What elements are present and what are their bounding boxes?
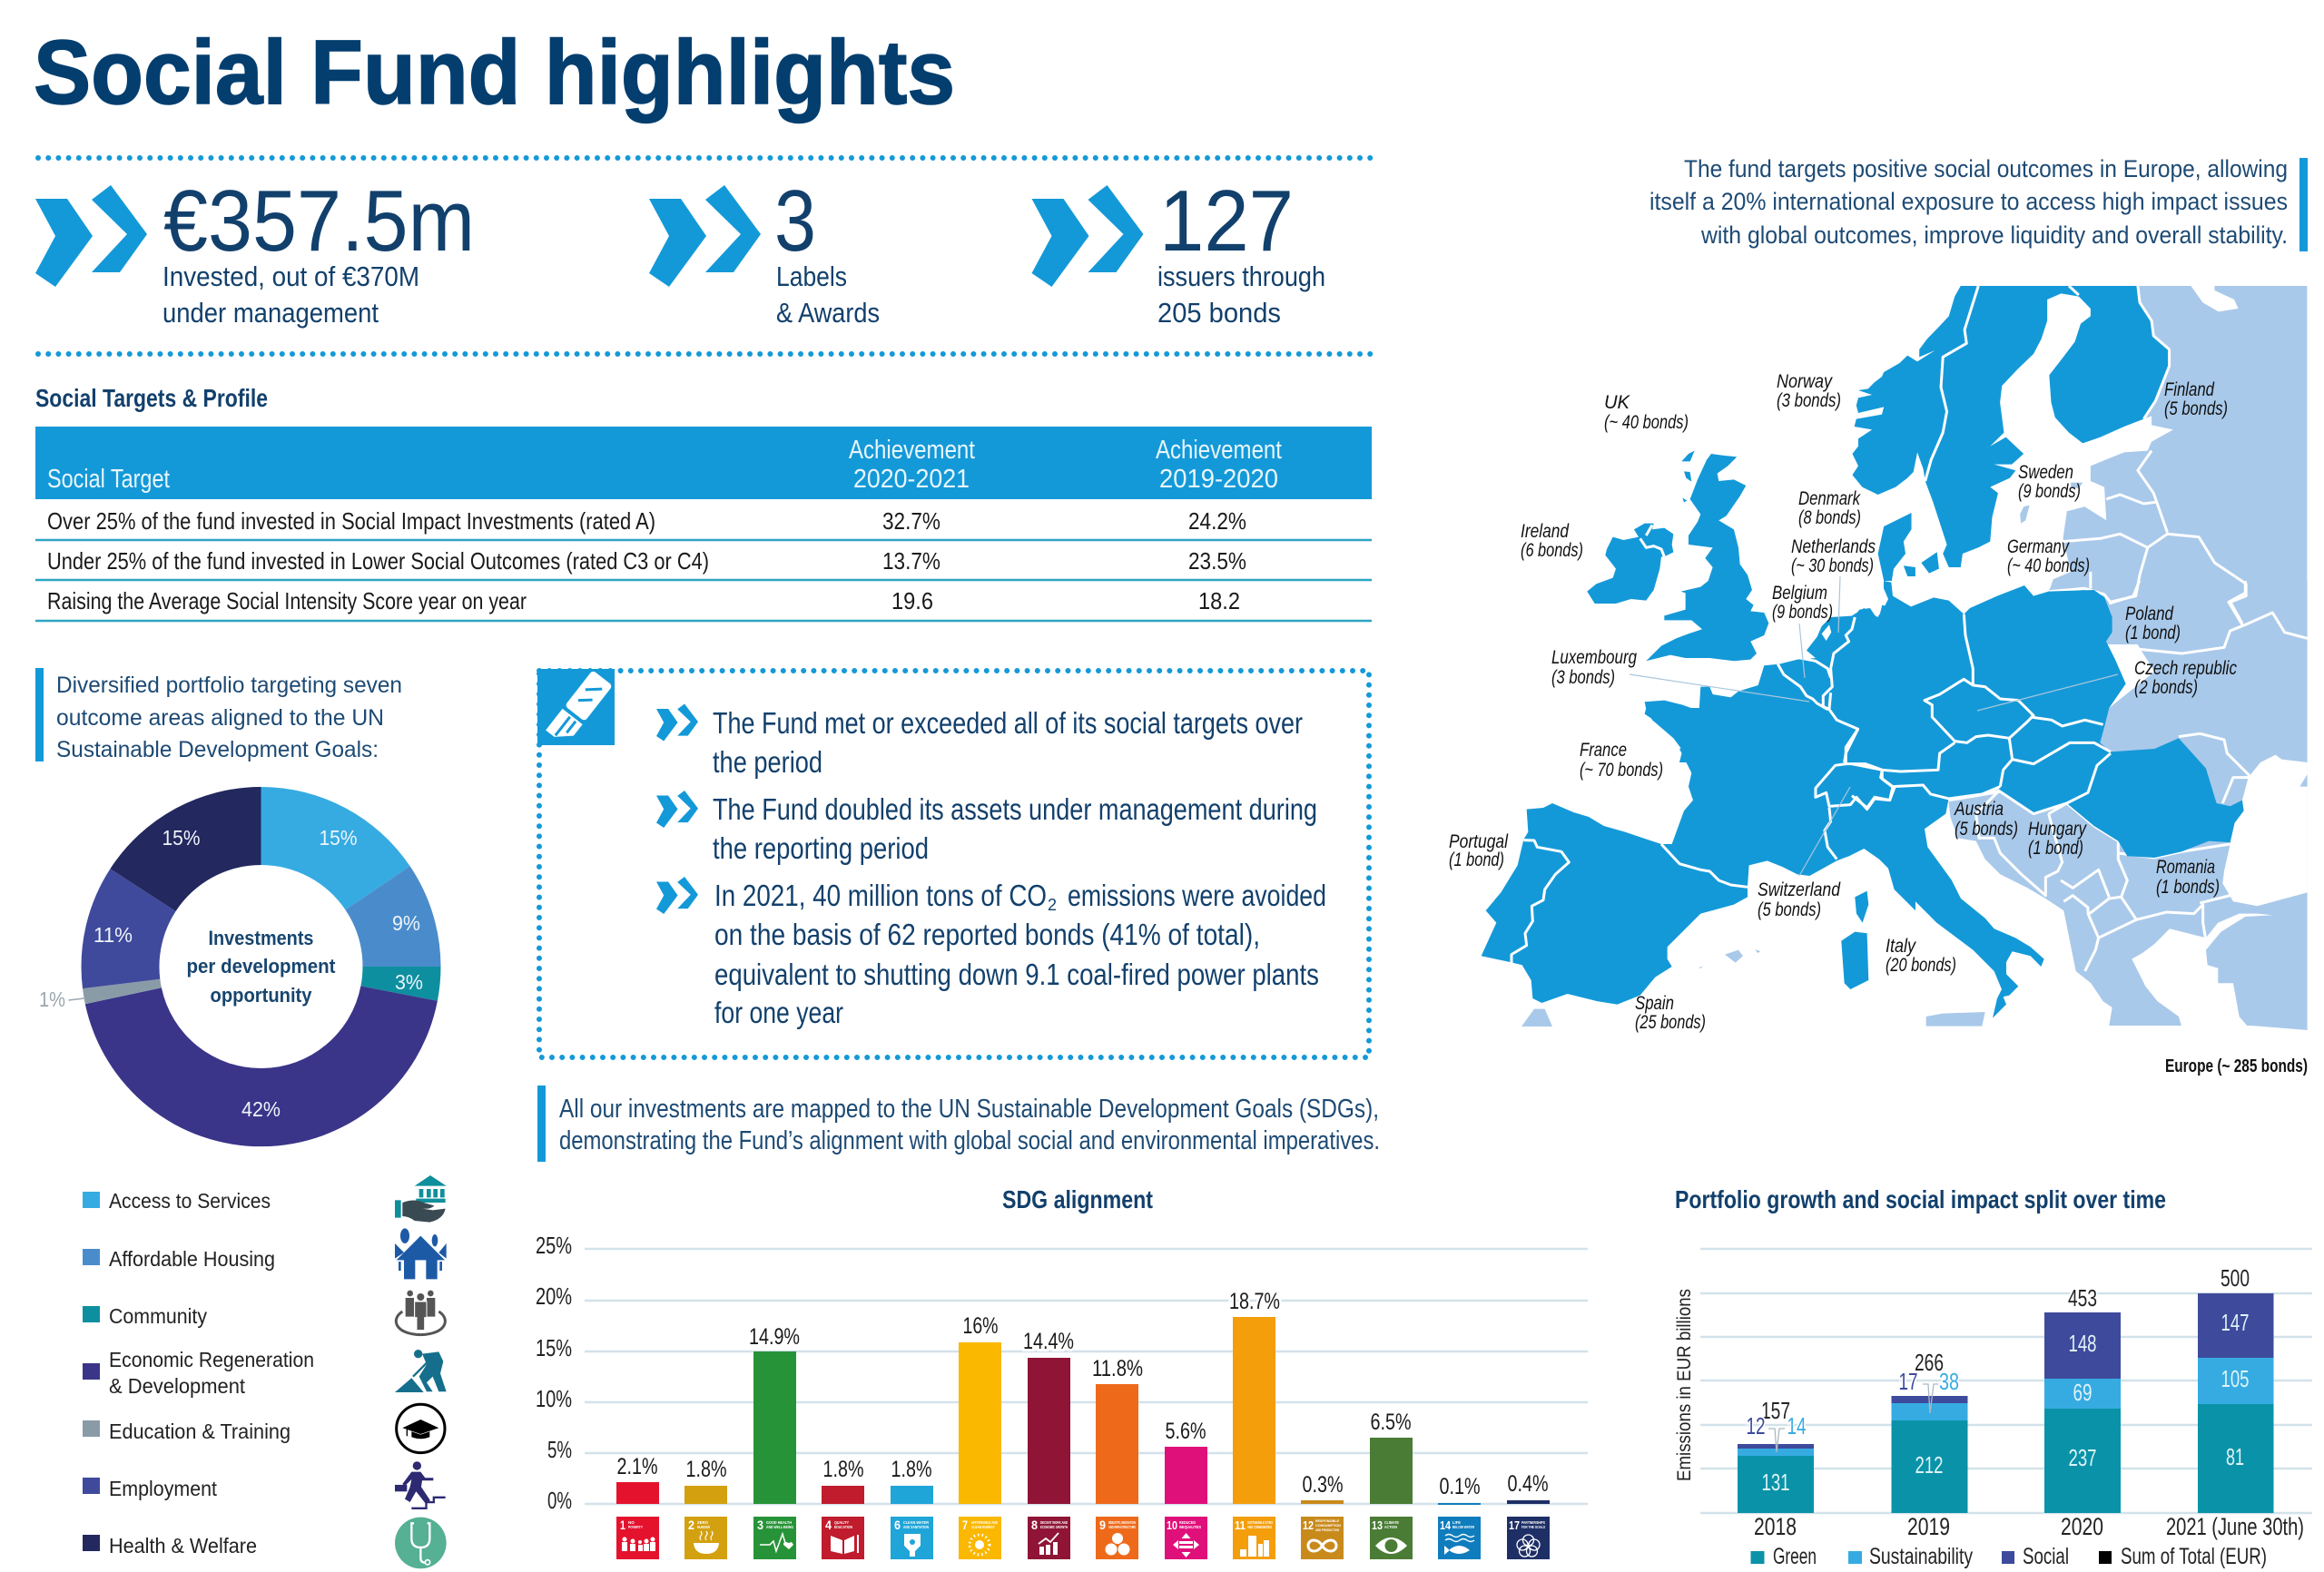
tile: SDG 3: 3 — [757, 1518, 763, 1532]
y axis labels — [536, 1232, 572, 1514]
row 1: 32.7% — [882, 507, 940, 535]
tile: SDG 4: QUALITY — [834, 1520, 849, 1525]
y axis labels: 15% — [536, 1334, 572, 1361]
tile: SDG 7: AFFORDABLE AND — [971, 1520, 999, 1525]
row 1: 24.2% — [1188, 507, 1246, 535]
small segment labels: 17 — [1899, 1368, 1917, 1395]
tile: SDG 8: DECENT WORK AND — [1040, 1520, 1068, 1525]
tile: SDG 4: 4 — [825, 1518, 832, 1532]
bar inner labels: 131 — [1761, 1469, 1790, 1496]
map labels: Luxembourg — [1551, 647, 1637, 668]
icon: bank on hand — [395, 1175, 447, 1223]
legend item: economic regeneration: & Development — [109, 1374, 246, 1398]
chart legend: Sustainability — [1869, 1544, 1973, 1569]
map labels: Switzerland — [1758, 879, 1841, 900]
map labels: (~ 40 bonds) — [1604, 412, 1689, 433]
table header: Achievement — [1156, 436, 1282, 465]
bar inner labels: 105 — [2221, 1365, 2250, 1392]
map labels: (1 bonds) — [2156, 877, 2220, 898]
key figure: invested — [35, 172, 475, 329]
bar value labels: 0.4% — [1507, 1471, 1549, 1497]
map: leader lines — [1630, 576, 2118, 876]
row 2: 23.5% — [1188, 547, 1246, 575]
tile: SDG 10: INEQUALITIES — [1179, 1525, 1201, 1529]
map labels: Finland — [2164, 379, 2215, 400]
table header: Achievement — [849, 436, 975, 465]
map labels: France — [1580, 740, 1627, 761]
bar totals: 500 — [2221, 1264, 2250, 1292]
table: social targets — [35, 427, 1372, 621]
segment: access to services — [261, 787, 410, 909]
tile: SDG 11 — [1233, 1517, 1275, 1559]
bar totals — [1761, 1264, 2250, 1424]
table header: 2020-2021 — [853, 465, 970, 494]
tile: SDG 13 — [1370, 1517, 1413, 1559]
small segment labels: 38 — [1939, 1368, 1959, 1395]
segment: health — [110, 787, 261, 911]
tile: SDG 13: CLIMATE — [1384, 1520, 1399, 1525]
tile: SDG 9: 9 — [1099, 1518, 1106, 1532]
bar: 2019 — [1892, 1396, 1968, 1513]
caption: Labels — [776, 260, 847, 292]
segment: employment — [82, 869, 176, 988]
row 3: 19.6 — [891, 587, 933, 614]
bar value labels: 6.5% — [1371, 1410, 1411, 1435]
tile: SDG 3: GOOD HEALTH — [766, 1520, 792, 1525]
tile: SDG 12 — [1301, 1517, 1344, 1559]
bullet: CO2 avoided: emissions were avoided — [1068, 879, 1326, 912]
tile: SDG 6: AND SANITATION — [903, 1525, 929, 1529]
map labels: (1 bond) — [1449, 850, 1504, 870]
key figure: issuers — [1031, 172, 1325, 329]
legend item: health: Health & Welfare — [109, 1534, 257, 1557]
map labels: (2 bonds) — [2134, 677, 2198, 698]
bar value labels: 11.8% — [1092, 1356, 1143, 1381]
tile: SDG 1: POVERTY — [628, 1525, 643, 1529]
map labels: (~ 70 bonds) — [1580, 760, 1663, 781]
map labels: Austria — [1953, 799, 2004, 820]
bar value labels: 1.8% — [686, 1457, 726, 1482]
x axis labels — [1754, 1513, 2304, 1540]
legend item: employment: Employment — [109, 1477, 218, 1500]
tile: SDG 9: INDUSTRY, INNOVATION — [1108, 1520, 1136, 1525]
bullet: targets met: the period — [713, 745, 822, 779]
map labels: (20 bonds) — [1886, 955, 1956, 976]
bar value labels: 1.8% — [822, 1457, 864, 1482]
map labels: (5 bonds) — [2164, 398, 2228, 419]
caption: & Awards — [776, 297, 880, 329]
tile: SDG 3 — [753, 1517, 796, 1559]
tile: SDG 14: 14 — [1440, 1518, 1452, 1532]
y axis labels: 20% — [536, 1282, 572, 1310]
tile: SDG 9: AND INFRASTRUCTURE — [1108, 1525, 1136, 1529]
y axis labels: 0% — [547, 1487, 572, 1514]
tile: SDG 17 — [1507, 1517, 1550, 1559]
row 1 — [47, 507, 1246, 535]
segment: education — [83, 979, 162, 1004]
tile: SDG 8 — [1028, 1517, 1070, 1559]
callout: fund targets: itself a 20% international exposure to access high impact issues — [1649, 188, 2288, 215]
tile: SDG 6 — [891, 1517, 933, 1559]
map labels: Denmark — [1798, 488, 1861, 509]
tile: SDG 14: LIFE — [1452, 1520, 1461, 1525]
caption: under management — [162, 297, 379, 329]
caption: 205 bonds — [1157, 297, 1281, 329]
caption: issuers through — [1157, 260, 1325, 292]
bar value labels: 0.1% — [1440, 1474, 1480, 1499]
icon: graduation cap — [397, 1404, 445, 1453]
bar inner labels: 237 — [2068, 1444, 2097, 1471]
tile: SDG 7: 7 — [962, 1518, 968, 1532]
callout: diversified portfolio: Sustainable Development Goals: — [56, 737, 379, 762]
map labels: (1 bond) — [2028, 838, 2083, 859]
chart legend: Social — [2023, 1544, 2069, 1569]
map labels: (~ 30 bonds) — [1791, 555, 1874, 576]
caption — [162, 260, 419, 329]
bar inner labels — [1761, 1309, 2250, 1496]
map: light non-fund countries — [1521, 286, 2308, 1030]
bar: 2020 — [2044, 1312, 2121, 1513]
chart legend: Green — [1773, 1544, 1817, 1569]
map labels: Italy — [1886, 936, 1916, 957]
map labels: (5 bonds) — [1955, 819, 2018, 840]
tile: SDG 10 — [1165, 1517, 1207, 1559]
tile: SDG 6: CLEAN WATER — [903, 1520, 930, 1525]
bullet: CO2 avoided: equivalent to shutting down 9.1 coal-fired power plants — [714, 958, 1319, 991]
map: Europe bond distribution — [1449, 286, 2308, 1076]
bars — [616, 1317, 1550, 1505]
map labels: Spain — [1635, 993, 1674, 1014]
bullet: CO2 avoided — [656, 877, 1326, 1029]
tile: SDG 8: ECONOMIC GROWTH — [1040, 1525, 1068, 1529]
bullet: CO2 avoided: 2 — [1048, 896, 1057, 914]
legend item: economic regeneration: Economic Regeneration — [109, 1348, 314, 1371]
tile: SDG 17: PARTNERSHIPS — [1521, 1520, 1545, 1525]
donut labels: 9% — [392, 911, 420, 935]
bullet: assets doubled: the reporting period — [713, 831, 929, 865]
bar inner labels: 69 — [2073, 1379, 2092, 1406]
donut labels: 3% — [395, 970, 423, 994]
tile: SDG 12: CONSUMPTION — [1315, 1523, 1341, 1528]
bar value labels — [617, 1289, 1549, 1499]
map labels: Portugal — [1449, 831, 1509, 852]
map labels — [1449, 371, 2237, 1033]
donut centre label: opportunity — [211, 984, 312, 1007]
bar value labels: 0.3% — [1302, 1472, 1344, 1498]
tile: SDG 17: 17 — [1509, 1518, 1520, 1532]
tile: SDG 8: 8 — [1031, 1518, 1038, 1532]
stacked bar chart: portfolio growth — [1674, 1249, 2312, 1569]
segment: economic regeneration — [85, 986, 438, 1146]
bar value labels: 14.4% — [1023, 1329, 1074, 1354]
bar chart: SDG alignment — [536, 1232, 1588, 1559]
map labels: Ireland — [1521, 521, 1570, 542]
donut labels: 42% — [241, 1097, 281, 1121]
legend item: economic regeneration — [83, 1348, 314, 1398]
row 3: 18.2 — [1198, 587, 1240, 614]
tile: SDG 6: 6 — [894, 1518, 901, 1532]
bar value labels: 18.7% — [1229, 1289, 1280, 1314]
tile: SDG 11: AND COMMUNITIES — [1247, 1525, 1272, 1529]
tile: SDG 1 — [616, 1517, 659, 1559]
icon: pencil badge — [537, 669, 615, 746]
SDG tiles — [616, 1517, 1550, 1559]
row 2 — [47, 547, 1246, 575]
donut centre label: per development — [187, 955, 336, 978]
donut chart: investments per development opportunity — [39, 787, 441, 1146]
callout: SDG mapping: All our investments are mapped to the UN Sustainable Development Goals (SDGs), — [559, 1095, 1379, 1124]
bar: 2018 — [1738, 1444, 1814, 1513]
callout: fund targets: with global outcomes, improve liquidity and overall stability. — [1700, 221, 2288, 249]
table header — [35, 427, 1372, 499]
tile: SDG 12: RESPONSIBLE — [1315, 1518, 1339, 1523]
tile: SDG 13: ACTION — [1384, 1525, 1397, 1529]
caption — [776, 260, 880, 329]
map: fund countries — [1482, 286, 2244, 1018]
tile: SDG 9 — [1096, 1517, 1138, 1559]
donut labels: 15% — [162, 826, 200, 850]
tile: SDG 10: 10 — [1167, 1518, 1177, 1532]
y axis labels: 5% — [547, 1436, 572, 1463]
y axis title: Emissions in EUR billions — [1674, 1289, 1695, 1481]
tile: SDG 14: BELOW WATER — [1452, 1525, 1475, 1529]
tile: SDG 10: REDUCED — [1179, 1520, 1196, 1525]
tile: SDG 11: 11 — [1235, 1518, 1246, 1532]
tile: SDG 17: FOR THE GOALS — [1521, 1525, 1545, 1529]
heading: social targets: Social Targets & Profile — [35, 384, 268, 412]
row 2: Under 25% of the fund invested in Lower Social Outcomes (rated C3 or C4) — [47, 547, 709, 575]
tile: SDG 2: HUNGER — [697, 1525, 711, 1529]
tile: SDG 11: SUSTAINABLE CITIES — [1247, 1520, 1273, 1525]
map labels: UK — [1604, 392, 1630, 413]
bar value labels: 1.8% — [891, 1457, 931, 1482]
x axis labels: 2019 — [1907, 1513, 1950, 1540]
callout: diversified portfolio: Diversified portfolio targeting seven — [56, 673, 402, 698]
donut centre label — [187, 927, 336, 1007]
title: Social Fund highlights — [34, 22, 955, 123]
callout: SDG mapping — [537, 1086, 1380, 1162]
map labels: Norway — [1777, 371, 1833, 392]
donut labels — [94, 826, 423, 1121]
tile: SDG 4 — [822, 1517, 864, 1559]
heading: portfolio growth: Portfolio growth and social impact split over time — [1675, 1185, 2166, 1213]
map labels: Germany — [2007, 536, 2070, 557]
bullet: CO2 avoided: for one year — [714, 996, 843, 1029]
small segment labels: 14 — [1787, 1412, 1807, 1439]
map labels: (9 bonds) — [1772, 602, 1833, 623]
tile: SDG 2 — [684, 1517, 727, 1559]
small segment labels — [1747, 1368, 1959, 1439]
segment: community — [360, 967, 441, 1001]
legend item: education: Education & Training — [109, 1420, 290, 1443]
icon: stethoscope — [395, 1518, 447, 1568]
bullet: targets met: The Fund met or exceeded all of its social targets over — [713, 706, 1303, 740]
x axis labels: 2020 — [2061, 1513, 2103, 1540]
tile: SDG 14 — [1438, 1517, 1481, 1559]
callout: diversified portfolio — [35, 668, 402, 762]
map labels: Romania — [2156, 857, 2215, 878]
bullet: CO2 avoided: In 2021, 40 million tons of CO — [714, 879, 1047, 912]
map labels: Netherlands — [1791, 536, 1876, 557]
tile: SDG 3: AND WELL-BEING — [766, 1525, 793, 1529]
bar inner labels: 148 — [2068, 1330, 2097, 1357]
table header: 2019-2020 — [1159, 465, 1278, 494]
bar value labels: 14.9% — [749, 1324, 800, 1350]
caption — [1157, 260, 1325, 329]
small segment labels: 12 — [1747, 1412, 1765, 1439]
map labels: Hungary — [2028, 819, 2087, 840]
tile: SDG 7: CLEAN ENERGY — [971, 1525, 995, 1529]
table header: Social Target — [47, 465, 170, 494]
panel: key results callout — [537, 669, 1369, 1057]
label: 1% — [39, 987, 84, 1011]
donut labels: 15% — [320, 826, 358, 850]
chart legend: Sum of Total (EUR) — [2121, 1544, 2267, 1569]
leader lines — [1768, 1384, 1939, 1452]
map: country borders — [1512, 286, 2170, 964]
callout: SDG mapping: demonstrating the Fund’s alignment with global social and environmental imperatives. — [559, 1126, 1380, 1155]
tile: SDG 2: ZERO — [697, 1520, 708, 1525]
map labels: Sweden — [2018, 462, 2073, 483]
map labels: (8 bonds) — [1798, 507, 1861, 528]
key figure: labels — [649, 172, 880, 329]
bar value labels: 5.6% — [1166, 1419, 1206, 1444]
legend item: community: Community — [109, 1304, 207, 1328]
map labels: (~ 40 bonds) — [2007, 555, 2090, 576]
row 3 — [47, 587, 1240, 614]
icon: double chevron — [35, 185, 147, 287]
chart legend — [1750, 1544, 2267, 1569]
bar value labels: 2.1% — [617, 1454, 657, 1479]
bullet: targets met — [656, 704, 1303, 779]
tile: SDG 4: EDUCATION — [834, 1525, 852, 1529]
tile: SDG 7 — [959, 1517, 1001, 1559]
map labels: (1 bond) — [2125, 623, 2181, 644]
row 3: Raising the Average Social Intensity Score year on year — [47, 587, 527, 614]
bar totals: 453 — [2068, 1284, 2097, 1312]
tile: SDG 12: 12 — [1303, 1518, 1314, 1532]
legend: outcome areas — [83, 1189, 314, 1557]
tile: SDG 1: 1 — [620, 1518, 625, 1532]
map labels: Belgium — [1772, 583, 1827, 604]
map labels: (3 bonds) — [1551, 667, 1615, 688]
callout: fund targets — [1649, 155, 2308, 251]
row 2: 13.7% — [882, 547, 940, 575]
x axis labels: 2018 — [1754, 1513, 1797, 1540]
bullet: assets doubled: The Fund doubled its assets under management during — [713, 792, 1317, 826]
tile: SDG 12: AND PRODUCTION — [1315, 1528, 1339, 1532]
icon: house — [395, 1228, 447, 1279]
bar: 2021 — [2198, 1293, 2273, 1513]
legend item: access to services: Access to Services — [109, 1189, 271, 1213]
tile: SDG 2: 2 — [688, 1518, 694, 1532]
y axis labels: 25% — [536, 1232, 572, 1259]
donut centre label: Investments — [209, 927, 314, 949]
y axis labels: 10% — [536, 1385, 572, 1412]
bar inner labels: 81 — [2226, 1443, 2244, 1470]
tile: SDG 13: 13 — [1372, 1518, 1383, 1532]
figure: €357.5m — [163, 172, 475, 270]
heading: SDG alignment: SDG alignment — [1002, 1185, 1153, 1213]
legend item: affordable housing: Affordable Housing — [109, 1247, 275, 1271]
bar totals: 157 — [1761, 1397, 1790, 1424]
bar value labels: 16% — [962, 1313, 999, 1339]
map labels: (3 bonds) — [1777, 390, 1841, 411]
icon: community — [396, 1291, 445, 1335]
row 1: Over 25% of the fund invested in Social Impact Investments (rated A) — [47, 507, 655, 535]
icon: double chevron — [649, 185, 761, 287]
label: 1%: 1% — [39, 987, 65, 1011]
bar inner labels: 212 — [1915, 1451, 1943, 1479]
callout: diversified portfolio: outcome areas aligned to the UN — [56, 705, 384, 731]
donut labels: 11% — [94, 923, 133, 947]
bullet: assets doubled — [656, 791, 1317, 865]
map labels: Poland — [2125, 604, 2174, 624]
icon: digger — [395, 1350, 447, 1392]
map labels: (9 bonds) — [2018, 481, 2081, 502]
bar totals: 266 — [1915, 1349, 1944, 1376]
segment: affordable housing — [345, 866, 441, 967]
map labels: (25 bonds) — [1635, 1012, 1706, 1033]
tile: SDG 1: NO — [628, 1520, 635, 1525]
caption: Invested, out of €370M — [162, 260, 419, 292]
bullet: CO2 avoided: on the basis of 62 reported bonds (41% of total), — [714, 918, 1260, 951]
bar inner labels: 147 — [2221, 1309, 2250, 1336]
figure: 3 — [774, 172, 816, 270]
map labels: (5 bonds) — [1758, 899, 1821, 920]
map labels: (6 bonds) — [1521, 540, 1583, 561]
figure: 127 — [1159, 172, 1294, 270]
icon: double chevron — [1031, 185, 1144, 287]
map labels: Czech republic — [2134, 658, 2237, 679]
icon: runner on stairs — [395, 1461, 446, 1509]
